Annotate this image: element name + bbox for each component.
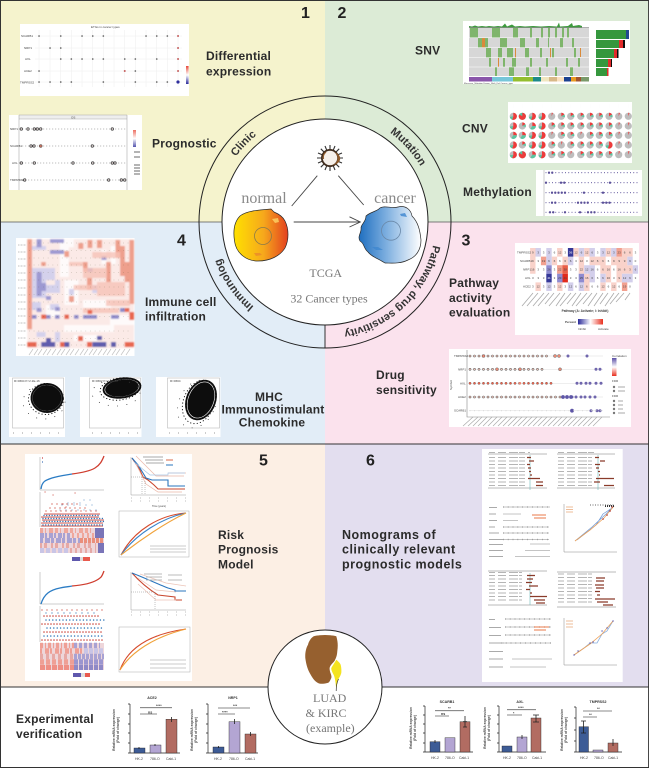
chart: differential expression dot plot — [20, 24, 189, 96]
chart: pathway heatmap: 6 — [613, 267, 615, 271]
chart: pathway heatmap: 6 — [597, 276, 599, 280]
chart: differential expression dot plot: SCARB1 — [21, 34, 33, 38]
chart: pathway heatmap: 9 — [618, 259, 620, 263]
heading: MHC immunostimulant chemokine: MHC — [255, 390, 283, 404]
chart: prognostic dot plot — [9, 115, 142, 190]
bar chart: TMPRSS2: Caki-1 — [608, 756, 618, 760]
chart: pathway heatmap: 3 — [613, 250, 615, 254]
chart: pathway heatmap: 3 — [602, 250, 604, 254]
bar chart: AXL: AXL — [516, 700, 524, 704]
chart: prognostic dot plot: TMPRSS2 — [10, 178, 25, 182]
chart: pathway heatmap: 6 — [602, 267, 604, 271]
heading: pathway activity evaluation: activity — [449, 291, 492, 305]
chart: pathway heatmap: 41 — [564, 276, 567, 280]
label: normal: normal — [241, 190, 287, 207]
panel 3: pathway and drug sensitivity — [376, 232, 639, 427]
chart: pathway heatmap: 3 — [575, 259, 577, 263]
chart: pathway heatmap: 3 — [586, 259, 588, 263]
bar chart: NRP1: NRP1 — [228, 696, 238, 700]
chart: drug sensitivity dot plot: AXL — [460, 381, 466, 385]
chart: pathway heatmap: 25 — [580, 276, 583, 280]
chart: pathway heatmap: 12 — [623, 276, 627, 280]
chart: pathway heatmap: 23 — [618, 250, 621, 254]
icon: cancer cell — [359, 207, 421, 263]
chart: pathway heatmap: 9 — [532, 250, 534, 254]
bar chart: TMPRSS2: (Fold of change) — [564, 717, 568, 743]
chart: drug sensitivity dot plot: SCARB1 — [454, 409, 466, 413]
chart: prognostic dot plot: NRP1 — [10, 127, 18, 131]
chart: pathway heatmap: 9 — [624, 259, 626, 263]
chart: pathway heatmap — [515, 243, 639, 335]
ring labels — [216, 127, 440, 337]
heading: nomograms of clinically relevant prognostic models: clinically relevant — [342, 543, 456, 557]
chart: pathway heatmap: 3 — [613, 276, 615, 280]
chart: pathway heatmap: Percent — [565, 320, 576, 324]
chart: pathway heatmap: 12 — [591, 259, 594, 263]
chart: pathway heatmap: 3 — [635, 250, 637, 254]
heading: differential expression: expression — [206, 64, 271, 78]
ring labels: Immunolog — [216, 258, 254, 312]
label: LUAD and KIRC example: LUAD — [313, 691, 347, 705]
bar chart: TMPRSS2: ** — [589, 713, 592, 717]
chart: pathway heatmap: 12 — [612, 285, 616, 289]
chart: pathway heatmap: 12 — [607, 250, 610, 254]
expression heatmap upper — [40, 528, 104, 561]
chart: pathway heatmap: 12 — [558, 250, 562, 254]
chart: pathway heatmap: 3 — [537, 276, 539, 280]
heading: risk prognosis model: Risk — [218, 528, 244, 542]
chart: pathway heatmap: 29 — [558, 276, 562, 280]
chart: drug sensitivity dot plot: NRP1 — [458, 367, 466, 371]
bar chart: ACE2: HK-2 — [135, 757, 143, 761]
chart: pathway heatmap: 0 — [635, 259, 637, 263]
bar chart: SCARB1: (Fold of change) — [413, 715, 417, 741]
chart: drug sensitivity dot plot: Symbol — [449, 380, 453, 390]
chart: pathway heatmap: 6 — [554, 259, 556, 263]
bar chart: AXL: Relative mRNA expression — [483, 707, 487, 749]
chart: pathway heatmap: 6 — [591, 285, 593, 289]
bar chart: SCARB1 — [409, 700, 473, 760]
chart: pathway heatmap: 3 — [554, 267, 556, 271]
label: cancer: cancer — [374, 190, 417, 207]
number 5: 5 — [259, 452, 268, 470]
bar chart: ACE2: 786-O — [150, 757, 160, 761]
bar chart: NRP1: **** — [222, 710, 228, 714]
heading: methylation: Methylation — [463, 185, 532, 199]
bar chart: AXL: Caki-1 — [532, 756, 542, 760]
chart: pathway heatmap: 12 — [547, 285, 551, 289]
chart: pathway heatmap: 12 — [585, 267, 589, 271]
chart: pathway heatmap: 16 — [607, 276, 610, 280]
bar chart: NRP1: 786-O — [229, 757, 239, 761]
chart: drug sensitivity dot plot: TMPRSS2 — [454, 354, 469, 358]
chart: pathway heatmap: 16 — [591, 267, 594, 271]
bar chart: TMPRSS2: 786-O — [594, 756, 604, 760]
chart: pathway heatmap: 38 — [564, 267, 567, 271]
arrow: virus to normal — [292, 176, 317, 206]
nomogram C — [489, 507, 550, 556]
bar chart: NRP1 — [190, 696, 258, 761]
bar chart: SCARB1: Caki-1 — [459, 756, 469, 760]
chart: pathway heatmap: 6 — [629, 276, 631, 280]
chart: pathway heatmap: AXL — [525, 276, 531, 280]
chart: pathway heatmap: 6 — [586, 285, 588, 289]
bar chart: NRP1: Relative mRNA expression — [190, 709, 194, 751]
bar chart: NRP1: HK-2 — [214, 757, 222, 761]
chart: pathway heatmap: 6 — [635, 267, 637, 271]
chart: pathway heatmap: 22 — [558, 267, 562, 271]
chart: methylation dot plot — [536, 170, 642, 216]
bottom panel: experimental verification — [16, 696, 622, 761]
chart: pathway heatmap: 3 — [564, 250, 566, 254]
bar chart: AXL: * — [513, 712, 515, 716]
expression heatmap lower — [40, 643, 104, 677]
KM curve upper: Time (years) — [152, 505, 166, 508]
number 1: 1 — [301, 5, 310, 22]
bar chart: AXL: HK-2 — [503, 756, 511, 760]
nomogram G — [489, 619, 552, 667]
arrow: normal to cancer — [294, 217, 360, 227]
chart: pathway heatmap: 3 — [532, 276, 534, 280]
ROC curve upper — [119, 511, 189, 557]
chart: pathway heatmap: 9 — [629, 259, 631, 263]
chart: pathway heatmap: 3 — [537, 267, 539, 271]
chart: pathway heatmap: 3 — [564, 285, 566, 289]
chart: pathway heatmap: 3 — [548, 250, 550, 254]
outer ring — [199, 96, 451, 348]
bar chart: TMPRSS2: Relative mRNA expression — [560, 709, 564, 751]
heading: risk prognosis model: Model — [218, 557, 254, 571]
forest plot A — [488, 452, 547, 490]
bar chart: ACE2: Relative mRNA expression — [112, 709, 116, 751]
chart: pathway heatmap: 6 — [624, 250, 626, 254]
chart: differential expression dot plot: NRP1 — [24, 46, 32, 50]
chart: pathway heatmap: Activate — [598, 327, 609, 331]
chart: pathway heatmap: 22 — [580, 267, 583, 271]
panel 5: risk prognosis model — [25, 452, 279, 681]
chart: pathway heatmap: 6 — [597, 285, 599, 289]
chart: drug sensitivity dot plot: Correlation — [612, 354, 627, 358]
bar chart: ACE2: ACE2 — [147, 696, 157, 700]
chart: pathway heatmap: 12 — [580, 285, 583, 289]
chart: pathway heatmap: 6 — [570, 259, 572, 263]
chart: pathway heatmap: 12 — [585, 250, 589, 254]
heading: risk prognosis model: Prognosis — [218, 543, 279, 557]
arrow: virus to cancer — [338, 176, 364, 205]
chart: pathway heatmap: 12 — [574, 250, 578, 254]
heading: CNV: CNV — [462, 122, 488, 136]
heading: pathway activity evaluation: evaluation — [449, 306, 510, 320]
example circle: LUAD and KIRC kidney — [268, 630, 382, 744]
chart: SNV oncoplot — [463, 21, 630, 85]
heading: experimental verification: verification — [16, 727, 82, 741]
panel 4: immunology — [9, 232, 325, 437]
risk score curve upper — [40, 456, 104, 490]
chart: pathway heatmap: 9 — [618, 276, 620, 280]
chart: pathway heatmap: 6 — [575, 285, 577, 289]
icon: normal cell — [234, 209, 288, 261]
ring labels: Mutation — [390, 127, 424, 166]
bar chart: AXL — [483, 700, 546, 760]
bar chart: SCARB1: 786-O — [445, 756, 455, 760]
bar chart: AXL: **** — [518, 706, 524, 710]
inner white circle — [222, 119, 428, 325]
bar chart: SCARB1: SCARB1 — [440, 700, 454, 704]
chart: scatter plot 2: R=0662 P<2.2E-16 — [92, 379, 118, 383]
heading: MHC immunostimulant chemokine: Chemokine — [239, 415, 305, 429]
chart: drug sensitivity dot plot: ACE2 — [458, 395, 466, 399]
chart: pathway heatmap: 3 — [532, 285, 534, 289]
chart: pathway heatmap: 6 — [548, 259, 550, 263]
chart: pathway heatmap: 36 — [569, 250, 573, 254]
chart: differential expression dot plot: ACE2 — [24, 69, 32, 73]
bar chart: ACE2: **** — [156, 704, 162, 708]
chart: pathway heatmap: 9 — [613, 259, 615, 263]
chart: prognostic dot plot: OS — [71, 115, 75, 119]
chart: pathway heatmap: Pathway (A: Activate; I: Inhibit) — [562, 309, 608, 313]
chart: drug sensitivity dot plot — [449, 349, 631, 427]
panel 6: nomograms — [342, 449, 623, 682]
heading: immune cell infiltration: Immune cell — [145, 295, 217, 309]
chart: pathway heatmap: TMPRSS2 — [517, 250, 532, 254]
chart: pathway heatmap: Inhibit — [578, 327, 586, 331]
chart: differential expression dot plot: ETGs in cancer types — [91, 25, 120, 29]
chart: pathway heatmap: 3 — [537, 250, 539, 254]
panel 1: clinic — [9, 5, 310, 190]
chart: prognostic dot plot: SCARB1 — [10, 144, 22, 148]
bar chart: NRP1: (Fold of change) — [194, 717, 198, 743]
chart: pathway heatmap: 6 — [602, 259, 604, 263]
chart: differential expression dot plot: AXL — [25, 57, 31, 61]
heading: nomograms of clinically relevant prognostic models: Nomograms of — [342, 528, 436, 542]
chart: pathway heatmap: 16 — [607, 267, 610, 271]
heading: SNV: SNV — [415, 44, 440, 58]
chart: pathway heatmap: 12 — [537, 285, 540, 289]
forest plot F — [557, 572, 616, 607]
ROC curve lower — [119, 627, 190, 672]
chart: pathway heatmap: 6 — [597, 267, 599, 271]
chart: pathway heatmap: 19 — [542, 259, 546, 263]
chart: pathway heatmap: 26 — [547, 267, 551, 271]
chart: pathway heatmap: 3 — [575, 267, 577, 271]
chart: pathway heatmap: 3 — [543, 276, 545, 280]
number 6: 6 — [366, 452, 375, 470]
KM curve lower — [131, 572, 186, 615]
chart: scatter plot 3: R=0664 — [170, 379, 181, 383]
bar chart: SCARB1: HK-2 — [431, 756, 439, 760]
chart: pathway heatmap: 3 — [543, 250, 545, 254]
ring labels: Clinic — [231, 132, 256, 155]
bar chart: ACE2: (Fold of change) — [116, 717, 120, 743]
chart: immune infiltration heatmap — [16, 238, 134, 356]
heading: drug sensitivity: sensitivity — [376, 383, 437, 397]
heading: differential expression: Differential — [206, 49, 271, 63]
calibration plot D — [564, 504, 617, 552]
bar chart: TMPRSS2 — [560, 700, 622, 760]
chart: pathway heatmap: 6 — [564, 259, 566, 263]
chart: pathway heatmap: ACE2 — [523, 285, 531, 289]
chart: pathway heatmap: 3 — [635, 276, 637, 280]
forest plot B — [557, 452, 615, 490]
heading: pathway activity evaluation: Pathway — [449, 276, 499, 290]
number 4: 4 — [177, 232, 186, 250]
chart: pathway heatmap: 6 — [608, 259, 610, 263]
chart: pathway heatmap: 12 — [580, 259, 583, 263]
chart: pathway heatmap: 3 — [597, 250, 599, 254]
chart: pathway heatmap: 9 — [532, 259, 534, 263]
risk score curve lower — [40, 571, 104, 604]
bar chart: SCARB1: ** — [448, 706, 451, 710]
chart: CNV pies — [508, 102, 632, 163]
label: LUAD and KIRC example: & KIRC — [306, 706, 347, 720]
chart: pathway heatmap: 3 — [554, 285, 556, 289]
bar chart: TMPRSS2: TMPRSS2 — [590, 700, 606, 704]
chart: pathway heatmap: 12 — [601, 285, 605, 289]
bar chart: TMPRSS2: HK-2 — [580, 756, 588, 760]
chart: pathway heatmap: 6 — [629, 250, 631, 254]
chart: pathway heatmap: 16 — [585, 276, 589, 280]
heading: immune cell infiltration: infiltration — [145, 310, 206, 324]
heading: experimental verification: Experimental — [16, 712, 94, 726]
icon: kidney — [305, 635, 341, 691]
bar chart: NRP1: *** — [233, 704, 238, 708]
heading: prognostic: Prognostic — [152, 136, 217, 150]
bar chart: TMPRSS2: ** — [597, 707, 600, 711]
chart: SNV oncoplot: Missense_Mutation Frame_Shift_Del Cancer_type — [464, 82, 514, 85]
chart: scatter plot 3 — [156, 374, 224, 437]
chart: pathway heatmap: SCARB1 — [520, 259, 532, 263]
chart: pathway heatmap: 19 — [623, 285, 627, 289]
number 2: 2 — [338, 5, 346, 22]
label: 32 cancer types: 32 Cancer types — [290, 292, 368, 306]
chart: prognostic dot plot: AXL — [12, 161, 18, 165]
forest plot E — [488, 571, 547, 605]
chart: scatter plot 1 — [9, 377, 65, 437]
chart: pathway heatmap: 3 — [570, 276, 572, 280]
chart: pathway heatmap: 6 — [618, 285, 620, 289]
bar chart: NRP1: Caki-1 — [245, 757, 255, 761]
survival scatter upper — [40, 492, 104, 527]
chart: pathway heatmap: 6 — [602, 276, 604, 280]
panel 2: mutation — [338, 5, 642, 216]
bar chart: AXL: 786-O — [517, 756, 527, 760]
chart group: nomogram figures — [482, 449, 623, 682]
KM curve upper — [131, 456, 186, 508]
chart: pathway heatmap: 12 — [569, 285, 573, 289]
central circle diagram — [198, 96, 452, 348]
bar chart: SCARB1: ns — [441, 712, 445, 716]
calibration plot H — [564, 618, 617, 665]
chart: drug sensitivity dot plot: FDR — [612, 379, 619, 383]
chart: pathway heatmap: 3 — [629, 267, 631, 271]
chart: pathway heatmap: NRP1 — [523, 267, 531, 271]
bar chart: ACE2: ns — [148, 710, 152, 714]
chart: drug sensitivity dot plot: FDR — [612, 394, 619, 398]
chart: pathway heatmap: 3 — [543, 285, 545, 289]
chart: pathway heatmap: 6 — [608, 285, 610, 289]
chart: pathway heatmap: 6 — [554, 250, 556, 254]
ring labels: Pathway, drug sensitivity — [345, 246, 440, 337]
heading: drug sensitivity: Drug — [376, 368, 405, 382]
chart: pathway heatmap: 6 — [581, 250, 583, 254]
chart: pathway heatmap: 3 — [570, 267, 572, 271]
chart: pathway heatmap: 0 — [629, 285, 631, 289]
label: LUAD and KIRC example: (example) — [306, 721, 355, 735]
bar chart: ACE2 — [112, 696, 180, 761]
label: TCGA: TCGA — [309, 266, 342, 280]
chart: pathway heatmap: 3 — [554, 276, 556, 280]
chart: pathway heatmap: 3 — [543, 267, 545, 271]
icon: virus — [317, 145, 343, 171]
chart: differential expression dot plot: TMPRSS2 — [20, 80, 35, 84]
heading: MHC immunostimulant chemokine: Immunostimulant — [221, 403, 325, 417]
number 3: 3 — [462, 232, 470, 250]
chart: pathway heatmap: 6 — [591, 250, 593, 254]
chart: pathway heatmap: 3 — [575, 276, 577, 280]
chart: pathway heatmap: 41 — [547, 276, 551, 280]
chart: pathway heatmap: 6 — [559, 259, 561, 263]
bar chart: AXL: (Fold of change) — [487, 715, 491, 741]
chart: pathway heatmap: 3 — [537, 259, 539, 263]
chart: pathway heatmap: 6 — [597, 259, 599, 263]
chart group: risk model figures — [25, 454, 192, 681]
chart: pathway heatmap: 6 — [591, 276, 593, 280]
chart: pathway heatmap: 16 — [531, 267, 535, 271]
chart: pathway heatmap: 6 — [624, 267, 626, 271]
bar chart: SCARB1: Relative mRNA expression — [409, 707, 413, 749]
survival scatter lower — [40, 606, 104, 642]
chart: scatter plot 1: R=0664 P<2.2E-16 — [14, 379, 40, 383]
chart: scatter plot 2 — [80, 375, 142, 437]
chart: pathway heatmap: 16 — [618, 267, 621, 271]
bar chart: ACE2: Caki-1 — [166, 757, 176, 761]
heading: nomograms of clinically relevant prognostic models: prognostic models — [342, 557, 462, 571]
chart: pathway heatmap: 12 — [558, 285, 562, 289]
